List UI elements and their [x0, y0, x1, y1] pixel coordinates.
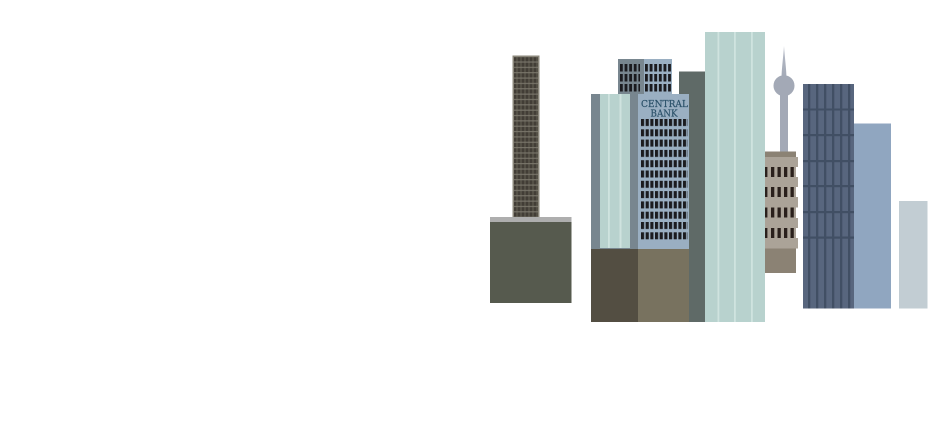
building: central bank — [591, 94, 689, 322]
building: rear block with windows — [618, 59, 672, 95]
sign: central bank: CENTRAL — [641, 99, 689, 110]
building: pale grey block — [899, 201, 928, 308]
building: mint glass tower — [705, 32, 765, 322]
building: slim dark tower on plinth — [490, 56, 572, 303]
sign: central bank — [641, 99, 689, 120]
icon: tv tower — [774, 46, 794, 153]
building: dark grey slab — [679, 72, 706, 322]
building: tan stepped block — [765, 152, 798, 273]
building: navy grid tower — [803, 84, 854, 308]
building: blue block — [854, 124, 891, 308]
sign: central bank: BANK — [650, 108, 678, 120]
